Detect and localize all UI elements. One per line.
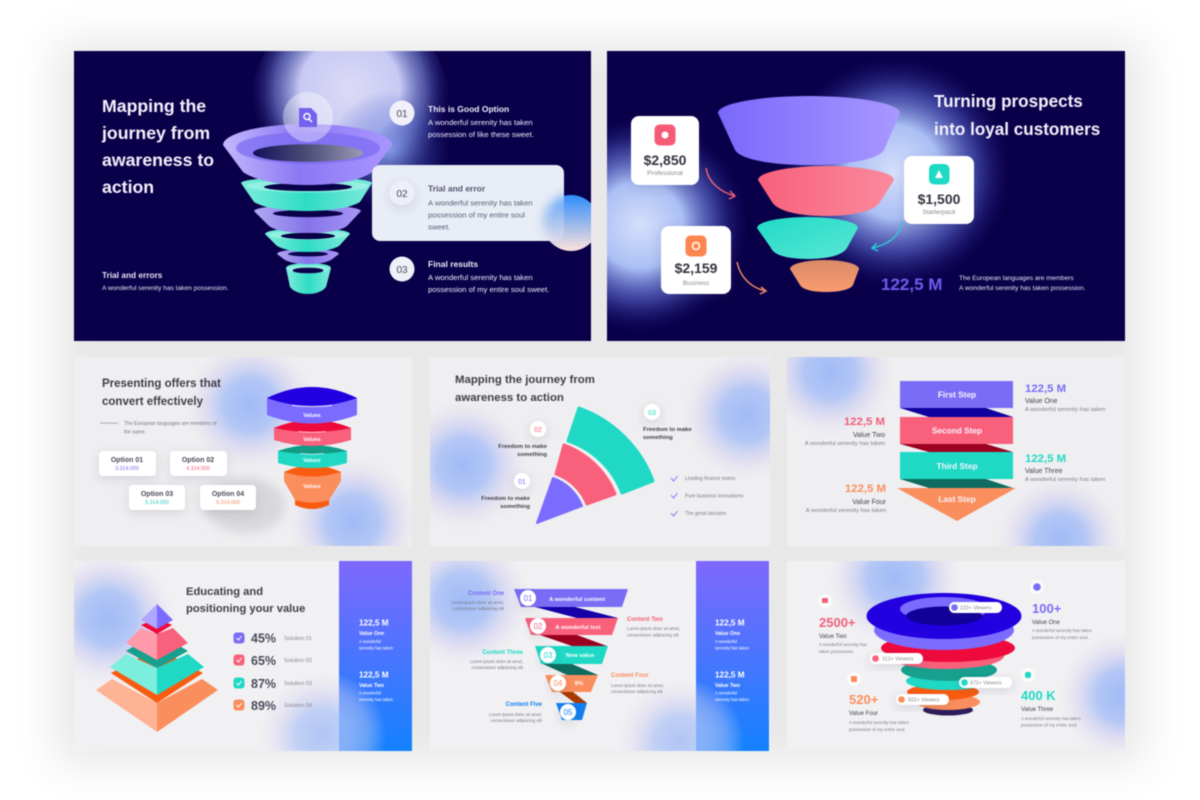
chart: pyramid bbox=[96, 604, 218, 732]
stat: value two: 122,5 M bbox=[844, 416, 885, 428]
sidebar: values: 122,5 M bbox=[359, 618, 389, 628]
label: content four: Content Four bbox=[611, 673, 649, 679]
label: content four: consectetuer adipiscing elit bbox=[611, 689, 663, 694]
card: professional: $2,850 bbox=[644, 152, 687, 168]
text: trial and errors: Trial and errors bbox=[102, 270, 163, 280]
text: european languages note bbox=[100, 421, 217, 436]
row: 45% solution 01 bbox=[234, 632, 312, 646]
stat: 2500+ value two: A wonderful serenity has bbox=[819, 642, 868, 647]
funnel: four-tier with values bbox=[267, 387, 357, 509]
card: professional: Professional bbox=[647, 170, 683, 177]
card: option 01 bbox=[99, 451, 156, 476]
badge 03 with label: something bbox=[643, 435, 673, 441]
arrow: business to funnel bbox=[737, 262, 766, 294]
card: starterpack: Starterpack bbox=[922, 209, 956, 216]
icon: search document in frosted circle bbox=[283, 92, 333, 142]
heading: educating and positioning: positioning your value bbox=[186, 603, 305, 615]
stat: 520+ value four: Value Four bbox=[849, 711, 878, 717]
heading: presenting offers: convert effectively bbox=[102, 396, 204, 408]
stat: value three: A wonderful serenity has taken bbox=[1025, 477, 1105, 483]
funnel: zigzag bands: 05 bbox=[564, 708, 573, 717]
funnel: four-tier with values: Values bbox=[303, 413, 321, 419]
stat: value three: 122,5 M bbox=[1025, 453, 1066, 465]
label: content four bbox=[611, 673, 664, 694]
stat: value three: Value Three bbox=[1025, 468, 1063, 475]
card: item 02: sweet. bbox=[428, 222, 450, 232]
stat: 2500+ value two: taken possession. bbox=[819, 649, 854, 654]
card: option 03: 5.314.000 bbox=[145, 500, 169, 506]
stat: value one: Value One bbox=[1025, 398, 1058, 405]
funnel: zigzag bands: A wonderful content bbox=[549, 597, 605, 603]
funnel: step bands: First Step bbox=[938, 390, 976, 400]
label: content one bbox=[451, 591, 505, 611]
heading: presenting offers: Presenting offers that bbox=[102, 378, 221, 390]
badge 01 with label: 01 bbox=[518, 479, 526, 486]
heading: mapping the journey: journey from bbox=[101, 123, 210, 143]
chart: pink sector bbox=[556, 445, 615, 504]
sidebar: values: 122,5 M bbox=[715, 618, 745, 628]
panel: mapping the journey (dark) bbox=[73, 50, 592, 342]
stat: 100+ value one: possession of my entire soul. bbox=[1032, 635, 1089, 640]
panel: presenting offers bbox=[92, 358, 411, 546]
funnel: orange tier bbox=[790, 260, 859, 292]
card: option 04: 6.314.000 bbox=[216, 500, 240, 506]
card: business bbox=[661, 226, 731, 294]
text: european languages note: The European languages are members of bbox=[124, 421, 217, 427]
card: item 02: A wonderful serenity has taken bbox=[428, 198, 533, 208]
funnel: four-tier with values: Values bbox=[303, 458, 321, 464]
sidebar: values: serenity has taken bbox=[359, 646, 394, 650]
heading: turning prospects: Turning prospects bbox=[934, 92, 1083, 111]
stat: value two bbox=[805, 416, 885, 447]
pill: 232+ viewers: 232+ Viewers bbox=[960, 606, 992, 612]
funnel: zigzag bands bbox=[514, 589, 628, 720]
heading: mapping the journey bbox=[455, 374, 595, 404]
stat: value one bbox=[1025, 383, 1105, 413]
label: content one: Content One bbox=[468, 591, 505, 597]
stat: 2500+ value two: 2500+ bbox=[819, 615, 856, 630]
sidebar: values: Value Two bbox=[715, 683, 740, 689]
card: item 02: Trial and error bbox=[428, 184, 486, 194]
badge 03 with label: Freedom to make bbox=[643, 427, 692, 433]
stat: 400 K value three: A wonderful serenity has taken bbox=[1021, 716, 1081, 721]
label: content one: consectetuer adipiscing elit bbox=[452, 606, 505, 611]
panel: pyramid bbox=[40, 550, 412, 799]
pill: 312+ viewers bbox=[870, 653, 923, 664]
row: 87% solution 03: 87% bbox=[251, 677, 276, 691]
stat: 520+ value four: 520+ bbox=[849, 692, 879, 707]
item 01: This is Good Option bbox=[428, 104, 509, 114]
stat: 100+ value one: A wonderful serenity has taken bbox=[1032, 628, 1092, 633]
pill: 472+ viewers bbox=[959, 677, 1012, 688]
heading: presenting offers bbox=[102, 378, 221, 408]
sidebar: values: A wonderful bbox=[359, 639, 381, 644]
card: item 02: possession of my entire soul bbox=[428, 210, 525, 220]
funnel: purple tier bbox=[718, 96, 900, 165]
card: starterpack: $1,500 bbox=[918, 191, 961, 207]
label: content five: consectetuer adipiscing elit bbox=[490, 718, 543, 723]
stat: value four: A wonderful serenity has taken bbox=[806, 508, 886, 514]
card: item 02: 02 bbox=[396, 189, 408, 200]
chart: purple sector bbox=[537, 478, 582, 523]
stat: value four bbox=[806, 483, 887, 514]
card: professional bbox=[631, 116, 699, 185]
text: european languages bbox=[959, 275, 1086, 292]
funnel: step bands: Last Step bbox=[938, 494, 976, 504]
label: content five bbox=[489, 702, 543, 723]
item 01: A wonderful serenity has taken bbox=[428, 118, 533, 127]
stat: 520+ value four: possession of my entire soul. bbox=[849, 727, 906, 732]
stat: value one: 122,5 M bbox=[1025, 383, 1066, 395]
pill: 502+ viewers bbox=[896, 694, 949, 705]
badge 03 with label: 03 bbox=[648, 410, 656, 417]
sidebar: values: serenity has taken bbox=[715, 697, 750, 702]
sidebar: values bbox=[696, 561, 769, 751]
funnel: six stacked rings bbox=[223, 124, 392, 294]
panel: turning prospects (dark) bbox=[606, 50, 1126, 342]
sidebar: values: A wonderful bbox=[359, 690, 381, 696]
stat: 122,5 M: 122,5 M bbox=[881, 275, 942, 294]
stat: value four: 122,5 M bbox=[845, 483, 886, 495]
row: 89% solution 04: 89% bbox=[251, 699, 276, 713]
checklist: Pure business innovations bbox=[685, 494, 744, 500]
funnel: pink tier bbox=[758, 166, 894, 216]
row: 65% solution 02: Solution 02 bbox=[284, 658, 312, 664]
panel: funnel sectors bbox=[430, 358, 770, 545]
funnel: step bands: Second Step bbox=[932, 426, 982, 436]
badge 01 with label: Freedom to make bbox=[481, 496, 531, 502]
label: content three: consectetuer adipiscing elit bbox=[471, 665, 524, 670]
heading: mapping the journey: awareness to bbox=[102, 150, 214, 170]
badge 03 with label bbox=[643, 404, 692, 441]
checklist: The great decision bbox=[685, 511, 726, 517]
funnel: zigzag bands: 8% bbox=[575, 681, 583, 687]
card: option 02 bbox=[170, 451, 227, 476]
card: business: Business bbox=[683, 280, 710, 287]
stat: 100+ value one: Value One bbox=[1032, 620, 1061, 626]
card: option 01: 3.314.000 bbox=[115, 466, 139, 472]
stat: 520+ value four: A wonderful serenity has taken bbox=[849, 720, 909, 725]
pill: 232+ viewers bbox=[949, 602, 1002, 613]
row: 65% solution 02: 65% bbox=[251, 654, 276, 668]
funnel: four-tier with values: Values bbox=[303, 437, 321, 443]
badge 01 with label: something bbox=[500, 504, 530, 510]
panel: zigzag funnel bbox=[395, 532, 770, 800]
heading: educating and positioning: Educating and bbox=[186, 586, 263, 598]
panel: step funnel bbox=[787, 356, 1108, 546]
label: content three: Content Three bbox=[482, 650, 524, 656]
sidebar: values: Value Two bbox=[359, 683, 384, 689]
stat: 520+ value four bbox=[847, 672, 909, 732]
row: 89% solution 04: Solution 04 bbox=[284, 703, 312, 709]
card: starterpack bbox=[904, 156, 974, 224]
badge 02 with label bbox=[498, 421, 548, 458]
stat: 400 K value three bbox=[1021, 668, 1081, 728]
heading: mapping the journey: Mapping the bbox=[102, 96, 206, 116]
pill: 312+ viewers: 312+ Viewers bbox=[882, 656, 914, 662]
sidebar: values: A wonderful bbox=[715, 690, 737, 696]
arrow: starterpack to funnel bbox=[872, 222, 902, 251]
text: european languages: A wonderful serenity has taken possession. bbox=[959, 285, 1086, 292]
card: option 04: Option 04 bbox=[212, 491, 244, 498]
item 03: Final results bbox=[428, 259, 478, 269]
heading: turning prospects bbox=[934, 92, 1100, 139]
panel: viewers tornado funnel bbox=[787, 510, 1186, 760]
stat: 2500+ value two bbox=[818, 594, 868, 654]
stat: 400 K value three: 400 K bbox=[1021, 688, 1056, 703]
funnel: zigzag bands: 02 bbox=[534, 622, 542, 631]
card: option 02: 4.314.000 bbox=[186, 466, 210, 472]
arrow: professional to funnel bbox=[706, 168, 735, 199]
card: business: $2,159 bbox=[675, 260, 718, 276]
label: content two bbox=[627, 617, 680, 638]
funnel: zigzag bands: 04 bbox=[554, 679, 563, 688]
funnel: step bands: Third Step bbox=[936, 461, 978, 471]
label: content one: Lorem ipsum dolor sit amet, bbox=[451, 600, 504, 605]
heading: mapping the journey: action bbox=[102, 177, 154, 197]
sidebar: values: serenity has taken bbox=[715, 646, 750, 650]
label: content five: Lorem ipsum dolor sit amet, bbox=[489, 712, 542, 717]
sidebar: values bbox=[339, 561, 412, 751]
row: 87% solution 03: Solution 03 bbox=[284, 681, 312, 687]
stat: 400 K value three: Value Three bbox=[1021, 707, 1054, 713]
item 03: 03 bbox=[396, 265, 408, 276]
row: 65% solution 02 bbox=[234, 654, 312, 668]
stat: value two: A wonderful serenity has taken bbox=[805, 441, 885, 447]
text: trial and errors bbox=[102, 270, 229, 292]
badge 01 with label bbox=[481, 473, 531, 510]
sidebar: values: Value One bbox=[359, 631, 384, 637]
heading: turning prospects: into loyal customers bbox=[934, 120, 1100, 139]
row: 87% solution 03 bbox=[234, 677, 312, 691]
card: option 03 bbox=[129, 485, 185, 510]
stat: 100+ value one: 100+ bbox=[1032, 601, 1062, 616]
funnel: zigzag bands: 03 bbox=[544, 651, 552, 660]
checklist: Leading finance teams bbox=[685, 476, 736, 482]
card: option 04 bbox=[200, 485, 256, 510]
label: content two: consectetuer adipiscing elit bbox=[627, 632, 679, 638]
funnel: step bands bbox=[897, 381, 1016, 521]
sidebar: values: serenity has taken bbox=[359, 697, 394, 702]
funnel: zigzag bands: New value bbox=[566, 653, 595, 659]
row: 45% solution 01: Solution 01 bbox=[284, 636, 312, 642]
item 01: possession of like these sweet. bbox=[428, 130, 534, 139]
label: content two: Lorem ipsum dolor sit amet, bbox=[627, 626, 680, 631]
sidebar: values: 122,5 M bbox=[359, 670, 389, 680]
pill: 472+ viewers: 472+ Viewers bbox=[970, 680, 1002, 686]
chart: teal sector bbox=[568, 408, 653, 493]
card: item 02 bbox=[371, 164, 565, 242]
stat: value four: Value Four bbox=[852, 499, 887, 506]
stat: value three bbox=[1025, 453, 1105, 483]
stat: value two: Value Two bbox=[853, 432, 885, 439]
label: content three: Lorem ipsum dolor sit amet, bbox=[470, 659, 523, 664]
badge 02 with label: 02 bbox=[534, 427, 542, 434]
badge 02 with label: something bbox=[517, 452, 547, 458]
pill: 502+ viewers: 502+ Viewers bbox=[908, 698, 940, 704]
heading: educating and positioning bbox=[186, 586, 305, 615]
funnel: four-tier with values: Values bbox=[303, 484, 321, 490]
stat: 400 K value three: possession of my entire soul. bbox=[1021, 722, 1078, 728]
item 03: possession of my entire soul sweet. bbox=[428, 285, 549, 294]
funnel: zigzag bands: A wonderful text bbox=[555, 625, 601, 631]
heading: mapping the journey: awareness to action bbox=[455, 392, 564, 404]
funnel: zigzag bands: 01 bbox=[524, 594, 532, 603]
card: option 02: Option 02 bbox=[182, 457, 214, 464]
row: 45% solution 01: 45% bbox=[251, 632, 276, 646]
sidebar: values: Value One bbox=[715, 631, 740, 637]
funnel: teal tier bbox=[757, 217, 858, 259]
label: content two: Content Two bbox=[627, 617, 663, 623]
label: content five: Content Five bbox=[506, 702, 543, 708]
checklist bbox=[671, 476, 744, 517]
row: 89% solution 04 bbox=[234, 699, 312, 713]
stat: value one: A wonderful serenity has taken bbox=[1025, 407, 1105, 413]
text: european languages: The European languages are members bbox=[959, 275, 1074, 282]
text: european languages note: the same. bbox=[124, 430, 146, 436]
text: trial and errors: A wonderful serenity has taken possession. bbox=[102, 285, 229, 292]
card: option 01: Option 01 bbox=[111, 457, 143, 464]
stat: 100+ value one bbox=[1030, 580, 1092, 640]
item 01: 01 bbox=[396, 109, 408, 120]
sidebar: values: 122,5 M bbox=[715, 670, 745, 680]
badge 02 with label: Freedom to make bbox=[498, 444, 548, 450]
stat: 2500+ value two: Value Two bbox=[819, 634, 847, 640]
label: content four: Lorem ipsum dolor sit amet, bbox=[611, 683, 664, 688]
item 03: A wonderful serenity has taken bbox=[428, 273, 533, 282]
item 01 bbox=[390, 100, 534, 139]
label: content three bbox=[470, 650, 524, 670]
card: option 03: Option 03 bbox=[141, 491, 173, 498]
funnel: stacked rings bbox=[866, 593, 1022, 716]
item 03 bbox=[390, 256, 549, 294]
heading: mapping the journey: Mapping the journey from bbox=[455, 374, 595, 386]
sidebar: values: A wonderful bbox=[715, 639, 737, 644]
heading: mapping the journey bbox=[101, 96, 214, 197]
